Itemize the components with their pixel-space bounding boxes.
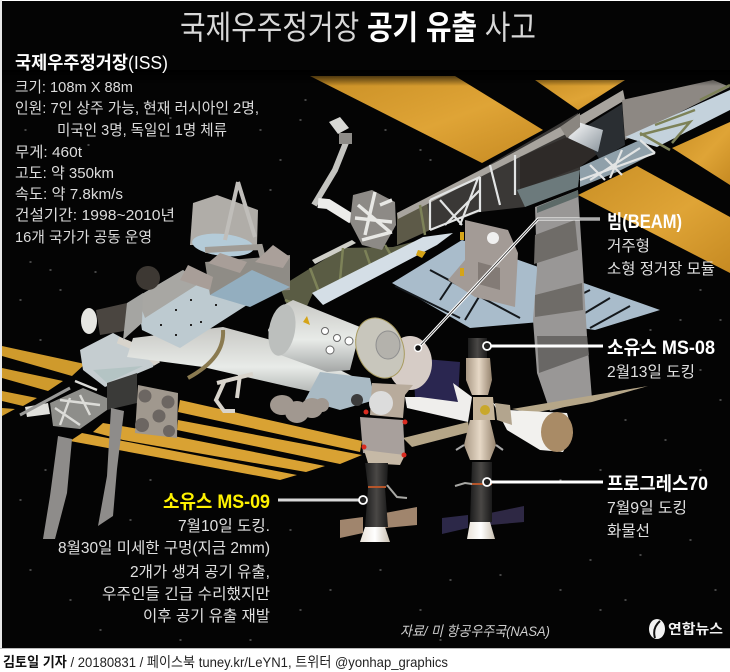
- left solar array strips: [2, 346, 85, 416]
- progress 70 spacecraft: [442, 462, 524, 539]
- yonhap logo: 연합뉴스: [668, 621, 723, 637]
- label: soyuz ms-09: 7월10일 도킹.: [178, 517, 270, 535]
- iss facts block: 국제우주정거장(ISS): [15, 53, 168, 73]
- diagonal laboratory module: [137, 270, 247, 348]
- beige solar panels: [403, 386, 648, 447]
- leader line to beam: [414, 219, 600, 352]
- iss facts block: 크기: 108m X 88m: [15, 79, 133, 96]
- iss facts block: 인원: 7인 상주 가능, 현재 러시아인 2명,: [15, 100, 259, 117]
- label: soyuz ms-08: 2월13일 도킹: [607, 363, 695, 381]
- label: soyuz ms-08: [607, 338, 715, 381]
- leader line to soyuz ms-08: [483, 342, 603, 350]
- label: progress 70: 프로그레스70: [607, 473, 708, 495]
- label: beam: 거주형: [607, 237, 650, 255]
- footer bar: 김토일 기자 / 20180831 / 페이스북 tuney.kr/LeYN1, 트위터 @yonhap_graphics: [3, 654, 448, 670]
- left cylinder module: [80, 333, 157, 387]
- underside equipment: [305, 372, 375, 410]
- purple solar panel: [413, 358, 460, 402]
- source note: 자료/ 미 항공우주국(NASA): [400, 623, 550, 639]
- bubble tanks: [270, 395, 329, 423]
- central docking column: [456, 338, 503, 460]
- upper solar arrays: [310, 76, 730, 273]
- white service module: [405, 383, 472, 422]
- title: 국제우주정거장 공기 유출 사고: [180, 9, 536, 46]
- white node module with windows: [265, 300, 360, 372]
- leader line to progress 70: [483, 478, 603, 486]
- docked craft at left end: [81, 266, 160, 340]
- grey panel box with circles: [135, 385, 178, 438]
- left folded radiators: [43, 408, 124, 539]
- label: soyuz ms-08: 소유스 MS-08: [607, 338, 715, 359]
- label: soyuz ms-09: 이후 공기 유출 재발: [143, 607, 270, 625]
- label: progress 70: 화물선: [607, 522, 650, 540]
- lower solar array strips: [70, 400, 362, 480]
- right service module: [493, 403, 573, 452]
- stars: [20, 100, 721, 640]
- grey panels on module: [180, 245, 290, 307]
- label: soyuz ms-09: 8월30일 미세한 구멍(지금 2mm): [58, 539, 270, 557]
- label: soyuz ms-09: 우주인들 긴급 수리했지만: [102, 585, 270, 603]
- iss facts block: 고도: 약 350km: [15, 165, 114, 182]
- label: soyuz ms-09: [58, 492, 270, 625]
- iss facts block: 16개 국가가 공동 운영: [15, 229, 152, 246]
- dextre robot: [216, 374, 253, 411]
- label: progress 70: 7월9일 도킹: [607, 499, 687, 517]
- main truss: [280, 80, 730, 330]
- iss facts block: 무게: 460t: [15, 144, 83, 161]
- folded radiator: [533, 190, 592, 411]
- footer bar: [0, 648, 730, 672]
- grey top cylinder module: [190, 182, 264, 262]
- leader line to soyuz ms-09: [278, 496, 367, 504]
- grey box module: [448, 220, 518, 307]
- iss facts block: 미국인 3명, 독일인 1명 체류: [57, 122, 227, 139]
- lower long module: [127, 327, 370, 400]
- round hatch disc: [347, 311, 413, 385]
- label: soyuz ms-09: 2개가 생겨 공기 유출,: [130, 563, 270, 581]
- central russian segment box: [360, 383, 413, 465]
- left edge strip: [0, 0, 2, 648]
- light blue radiator panels: [392, 240, 660, 330]
- label: beam: 소형 정거장 모듈: [607, 260, 715, 278]
- fade at top of picture: [2, 70, 730, 86]
- yonhap logo: [649, 619, 723, 639]
- iss facts block: [15, 53, 259, 246]
- grey machinery cluster: [350, 190, 396, 250]
- label: beam: [607, 211, 715, 278]
- beam module: [388, 336, 432, 390]
- left truss with end cylinder: [20, 366, 143, 429]
- soyuz ms-09 spacecraft: [340, 463, 417, 542]
- label: progress 70: [607, 473, 708, 540]
- label: beam: 빔(BEAM): [607, 211, 682, 233]
- robotic arm: [314, 117, 352, 219]
- iss facts block: 속도: 약 7.8km/s: [15, 186, 123, 203]
- label: soyuz ms-09: 소유스 MS-09: [163, 492, 270, 513]
- iss facts block: 건설기간: 1998~2010년: [15, 207, 175, 224]
